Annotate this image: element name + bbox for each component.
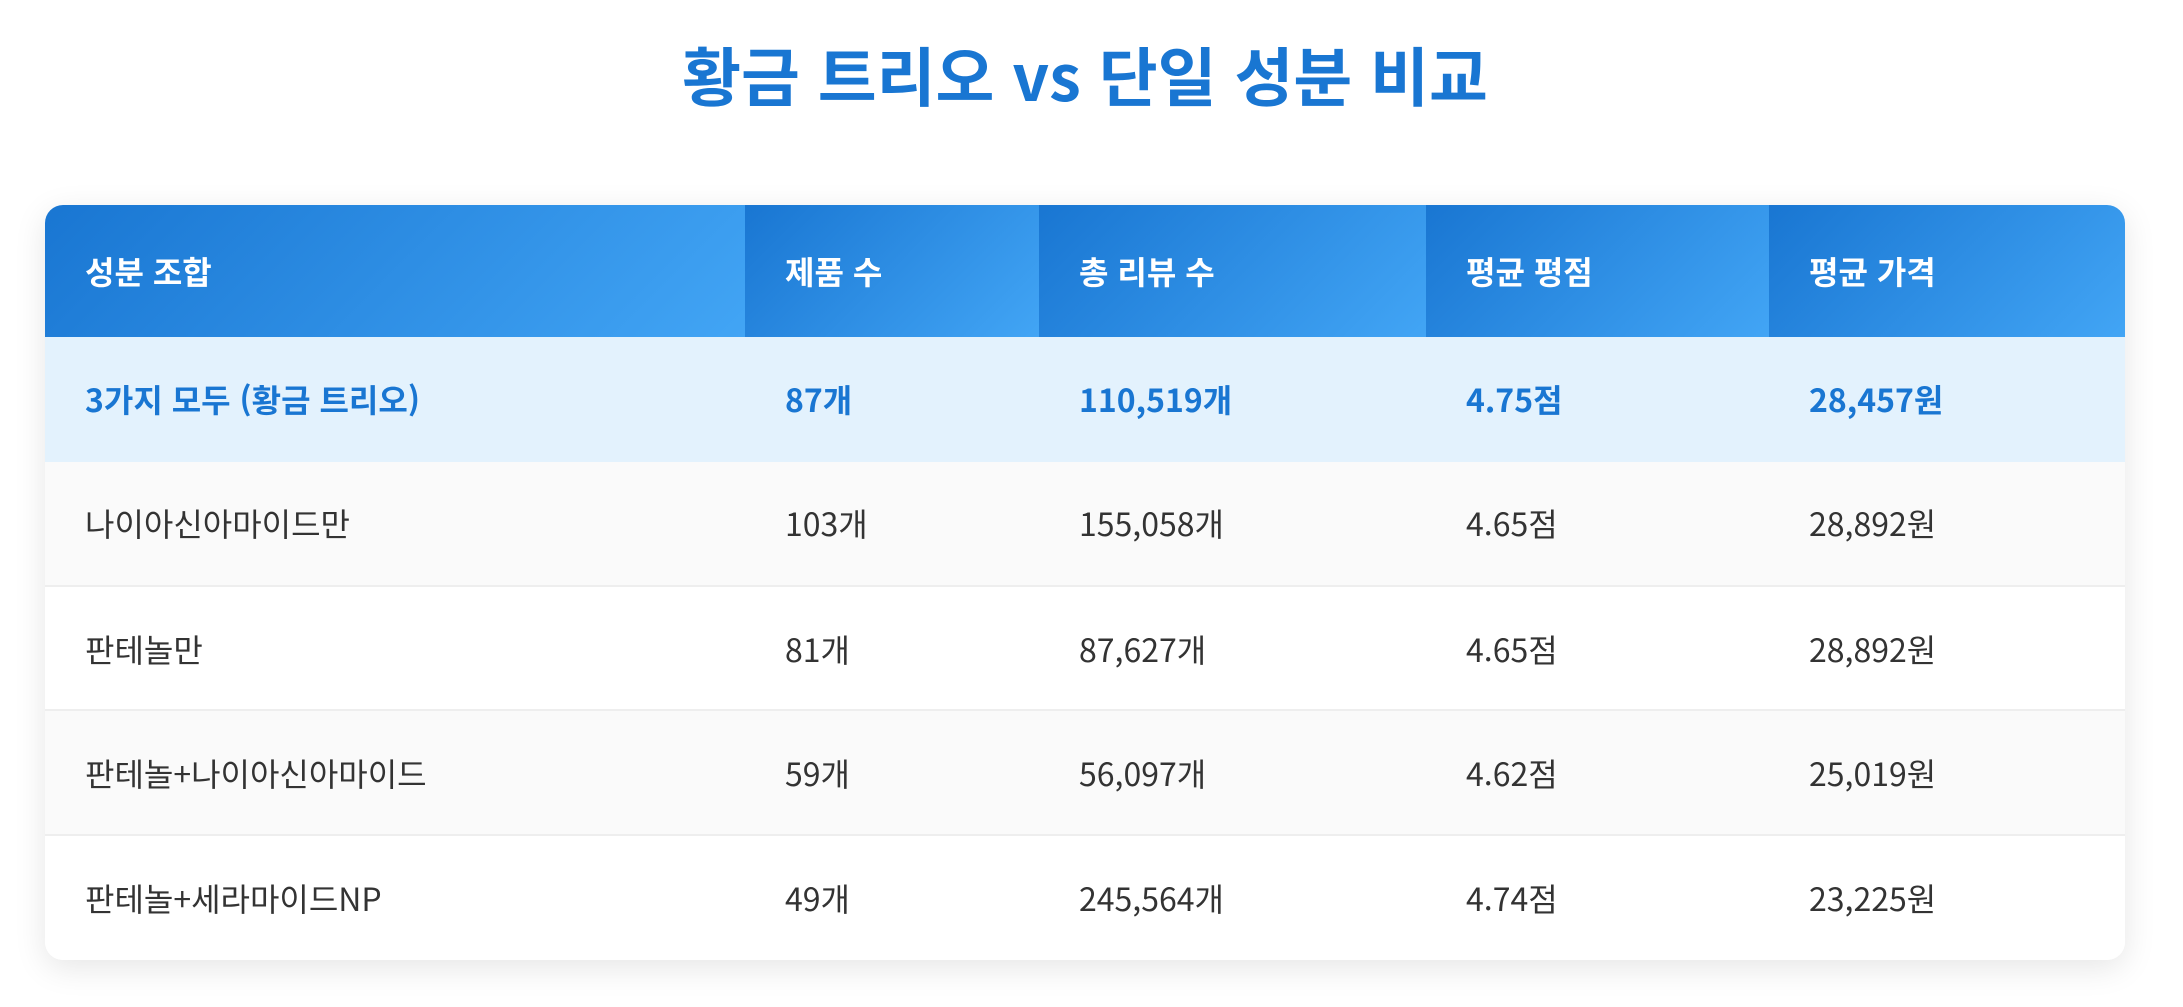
- review count: 87,627개: [1079, 626, 1206, 672]
- combination name: 판테놀+세라마이드NP: [85, 875, 382, 921]
- row: panthenol + niacinamide: [45, 711, 2125, 836]
- review count: 245,564개: [1079, 875, 1224, 921]
- row: niacinamide only: [45, 462, 2125, 587]
- comparison table: [45, 205, 2125, 960]
- review count: 56,097개: [1079, 750, 1206, 796]
- row: panthenol only: [45, 587, 2125, 711]
- average price: 28,457원: [1809, 376, 1943, 422]
- header: 평균 가격: [1769, 205, 2125, 337]
- review count: 110,519개: [1079, 376, 1232, 422]
- row: panthenol + ceramide NP: [45, 836, 2125, 960]
- header: 평균 가격: 평균 가격: [1809, 248, 1936, 294]
- title: 황금 트리오 vs 단일 성분 비교: [682, 28, 1488, 120]
- average price: 25,019원: [1809, 750, 1936, 796]
- header: 평균 평점: [1426, 205, 1769, 337]
- combination name: 판테놀만: [85, 626, 203, 672]
- product count: 103개: [785, 500, 868, 546]
- average price: 23,225원: [1809, 875, 1936, 921]
- average rating: 4.75점: [1466, 376, 1563, 422]
- header: 총 리뷰 수: 총 리뷰 수: [1079, 248, 1215, 294]
- average rating: 4.74점: [1466, 875, 1558, 921]
- average rating: 4.65점: [1466, 500, 1558, 546]
- table header row: [45, 205, 2125, 337]
- average price: 28,892원: [1809, 500, 1936, 546]
- combination name: 판테놀+나이아신아마이드: [85, 750, 427, 796]
- combination name: 3가지 모두 (황금 트리오): [85, 376, 420, 422]
- average rating: 4.62점: [1466, 750, 1558, 796]
- combination name: 나이아신아마이드만: [85, 500, 350, 546]
- header: 제품 수: [745, 205, 1039, 337]
- product count: 49개: [785, 875, 850, 921]
- product count: 81개: [785, 626, 850, 672]
- product count: 87개: [785, 376, 852, 422]
- header: 성분 조합: [45, 205, 745, 337]
- review count: 155,058개: [1079, 500, 1224, 546]
- header: 제품 수: 제품 수: [785, 248, 882, 294]
- header: 평균 평점: 평균 평점: [1466, 248, 1593, 294]
- average rating: 4.65점: [1466, 626, 1558, 672]
- product count: 59개: [785, 750, 850, 796]
- header: 총 리뷰 수: [1039, 205, 1426, 337]
- header: 성분 조합: 성분 조합: [85, 248, 212, 294]
- average price: 28,892원: [1809, 626, 1936, 672]
- highlighted row: golden trio: [45, 337, 2125, 462]
